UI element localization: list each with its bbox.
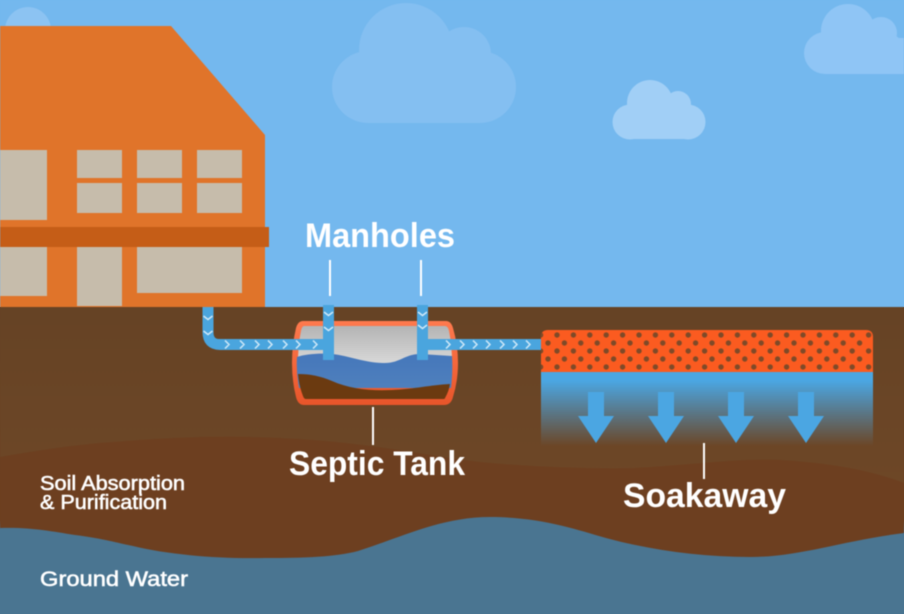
seepage gradient	[541, 372, 873, 446]
floor band	[0, 227, 269, 247]
house body and roof	[0, 26, 265, 307]
tank water	[297, 354, 452, 388]
seepage arrows	[578, 392, 824, 443]
cloud: top right	[804, 4, 904, 74]
label: Septic Tank: Septic Tank	[289, 445, 465, 483]
tank shell	[292, 321, 458, 405]
label: Soil Absorption & Purification: Soil Absorption	[40, 473, 185, 495]
label: Ground Water: Ground Water	[40, 568, 188, 591]
gravel dots	[541, 330, 873, 372]
ground: upper soil	[0, 307, 904, 614]
tank air space	[298, 326, 452, 363]
label: Soakaway: Soakaway	[623, 477, 786, 515]
label: Manholes: Manholes	[305, 217, 455, 255]
ground: absorption soil layer	[0, 437, 904, 614]
cloud: large centre	[332, 3, 516, 123]
upper windows	[0, 150, 242, 220]
cloud: small centre	[612, 80, 706, 140]
cloud: top left	[5, 7, 51, 53]
ground floor windows and door	[0, 247, 242, 306]
leader lines	[330, 260, 704, 479]
sky background	[0, 0, 904, 308]
soakaway	[541, 330, 873, 446]
pipe: house to tank	[208, 307, 324, 344]
tank sludge	[298, 374, 450, 399]
ground water	[0, 517, 904, 614]
gravel bed	[541, 330, 873, 372]
label: Soil Absorption & Purification: & Purification	[40, 492, 167, 514]
flow chevrons	[204, 312, 530, 348]
septic tank	[292, 321, 458, 405]
house	[0, 26, 269, 307]
pipe: tank to soakaway	[428, 339, 541, 350]
label: Soil Absorption & Purification	[40, 473, 185, 514]
manhole shaft: left	[323, 305, 334, 360]
manhole shaft: right	[417, 305, 428, 360]
